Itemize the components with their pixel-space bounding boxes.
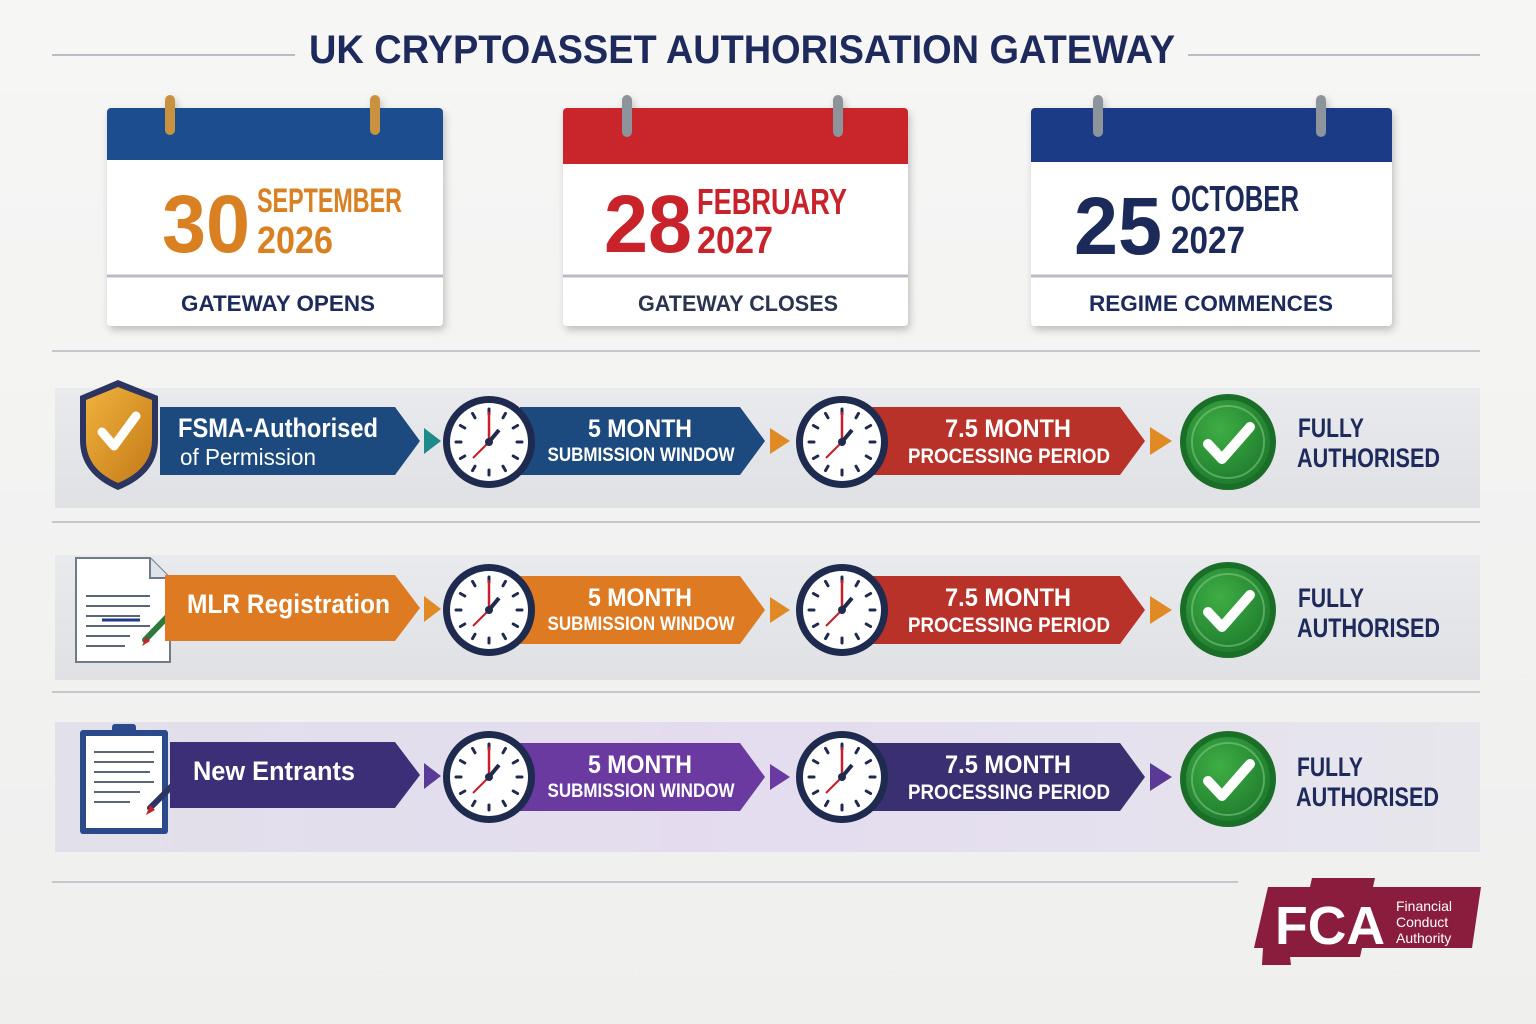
FCA logo	[1254, 878, 1481, 965]
row: FSMA-authorised: SUBMISSION WINDOW	[548, 445, 735, 466]
row: MLR registration: SUBMISSION WINDOW	[548, 614, 735, 635]
calendar: gateway opens	[107, 95, 443, 326]
row: MLR registration: AUTHORISED	[1297, 613, 1440, 643]
calendar: gateway opens: GATEWAY OPENS	[181, 291, 375, 316]
calendar: regime commences: OCTOBER	[1171, 178, 1299, 219]
icon: clipboard	[80, 724, 180, 834]
calendar: gateway closes: GATEWAY CLOSES	[638, 291, 838, 316]
row: new entrants: 5 MONTH	[588, 751, 692, 779]
row: new entrants: AUTHORISED	[1296, 782, 1439, 812]
row: FSMA-authorised: AUTHORISED	[1297, 443, 1440, 473]
row: FSMA-authorised: PROCESSING PERIOD	[908, 445, 1110, 468]
row: FSMA-authorised: 5 MONTH	[588, 415, 692, 443]
row: MLR registration: MLR Registration	[187, 589, 390, 619]
row: new entrants	[55, 722, 1480, 852]
FCA logo: FCA	[1275, 896, 1385, 956]
calendar: regime commences: 25	[1074, 181, 1162, 272]
row: MLR registration: 7.5 MONTH	[945, 584, 1071, 612]
row: new entrants: FULLY	[1297, 752, 1363, 782]
row: MLR registration	[55, 555, 1480, 680]
calendar: gateway closes: 2027	[697, 220, 773, 262]
calendar: gateway closes: 28	[604, 179, 692, 270]
row: MLR registration: PROCESSING PERIOD	[908, 614, 1110, 637]
row: FSMA-authorised: FSMA-Authorised	[178, 413, 378, 443]
row: MLR registration: 5 MONTH	[588, 584, 692, 612]
FCA logo: Authority	[1396, 930, 1451, 946]
calendar: gateway closes	[563, 95, 908, 326]
row: new entrants: PROCESSING PERIOD	[908, 781, 1110, 804]
FCA logo: Financial	[1396, 898, 1452, 914]
calendar: gateway opens: SEPTEMBER	[257, 182, 402, 220]
calendar: gateway opens: 2026	[257, 220, 333, 262]
calendar: regime commences: REGIME COMMENCES	[1089, 291, 1333, 316]
calendar: gateway closes: FEBRUARY	[697, 181, 847, 222]
row: FSMA-authorised: FULLY	[1298, 413, 1364, 443]
row: FSMA-authorised: 7.5 MONTH	[945, 415, 1071, 443]
calendar: regime commences	[1031, 95, 1392, 326]
icon: document	[76, 558, 172, 662]
row: new entrants: 7.5 MONTH	[945, 751, 1071, 779]
calendar: gateway opens: 30	[162, 179, 250, 270]
row: FSMA-authorised	[55, 380, 1480, 508]
icon: shield	[80, 380, 158, 490]
row: FSMA-authorised: of Permission	[180, 444, 316, 470]
row: new entrants: New Entrants	[193, 756, 355, 786]
row: new entrants: SUBMISSION WINDOW	[548, 781, 735, 802]
row: MLR registration: FULLY	[1298, 583, 1364, 613]
title: UK CRYPTOASSET AUTHORISATION GATEWAY	[309, 28, 1175, 72]
FCA logo: Conduct	[1396, 914, 1448, 930]
calendar: regime commences: 2027	[1171, 220, 1245, 262]
